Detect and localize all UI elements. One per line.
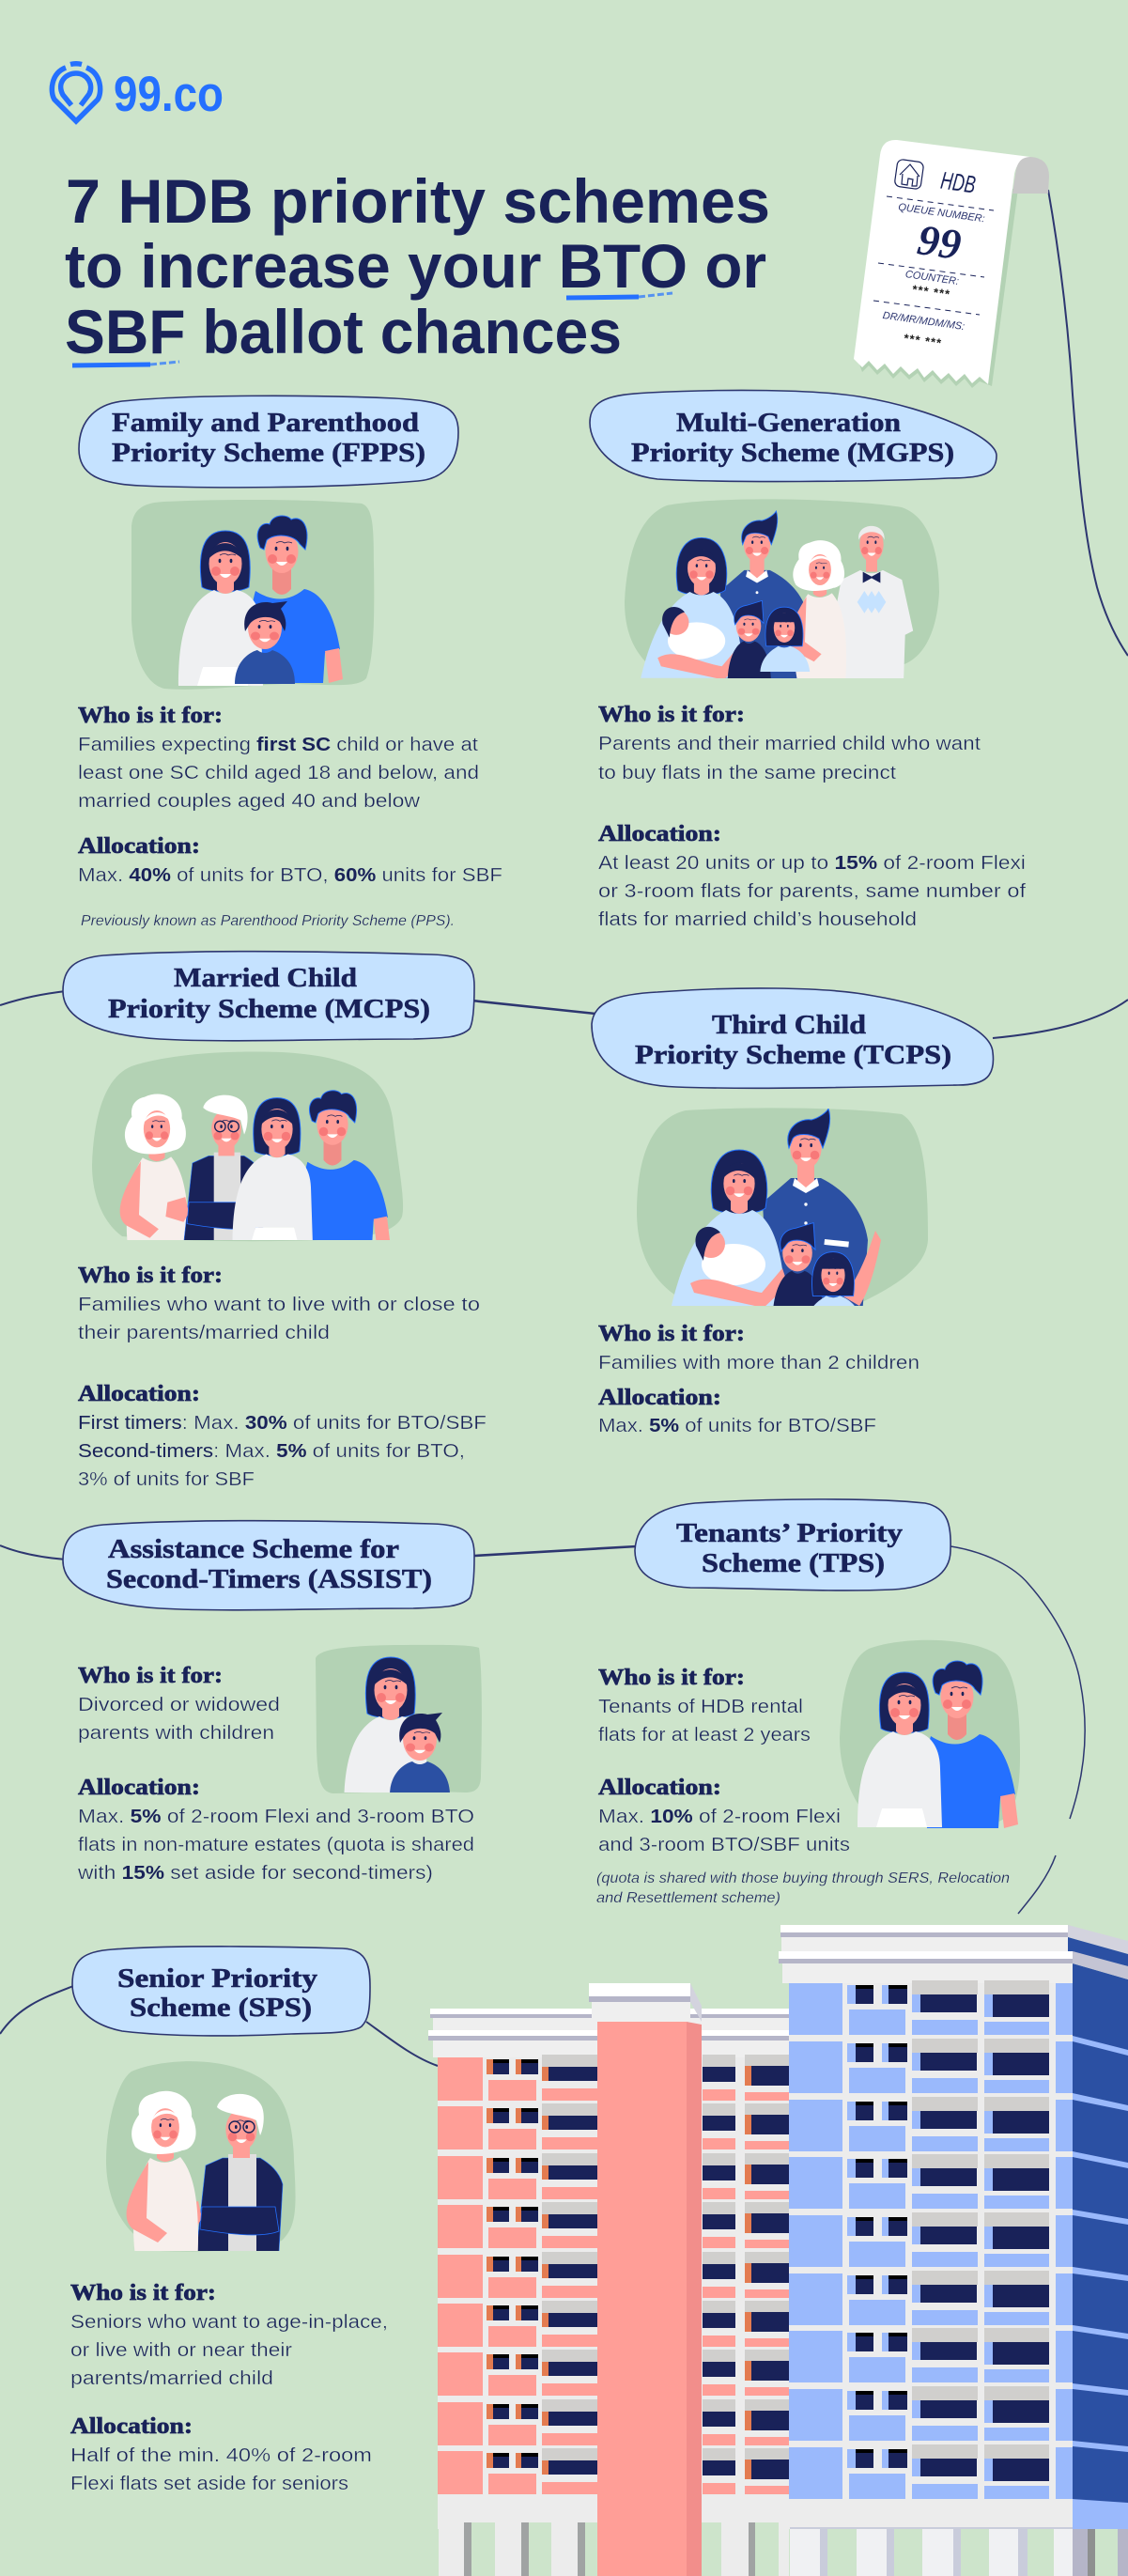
pill heading: FPPS: Priority Scheme (FPPS) [112,438,425,468]
text: allocation: Allocation: [78,834,200,859]
text: allocation [78,1382,487,1490]
panel: MCPS [63,952,487,1490]
text: allocation [598,1386,876,1436]
text: allocation: Allocation: [598,1386,721,1410]
text: allocation: Second-timers : Max. 5% of units for BTO, [78,1441,465,1462]
text: who is it for: Families with more than 2 children [598,1353,919,1373]
wordmark: 99.co [114,67,224,122]
text: who is it for [78,1264,480,1343]
text: who is it for: to buy flats in the same precinct [598,763,896,784]
icon: HDB queue receipt: COUNTER: [904,269,960,287]
text: who is it for [78,1664,280,1744]
text: who is it for: Who is it for: [598,703,745,727]
pill heading: ASSIST: Second-Timers (ASSIST) [106,1564,432,1594]
panel: MGPS [590,390,1027,930]
illustration: pink HDB block [428,1983,789,2576]
title [65,166,770,366]
text: allocation: Allocation: [78,1382,200,1406]
text: who is it for [598,1322,919,1373]
illustration: tenant couple [840,1640,1020,1828]
text: who is it for: parents with children [78,1723,274,1744]
text: who is it for: their parents/married child [78,1323,330,1343]
title: to increase your BTO or [65,231,766,301]
underline: BTO [566,293,672,298]
connector: left edge to ASSIST [0,1545,66,1560]
connector: TPS curve lower section [1018,1855,1056,1914]
illustration: parent and child [316,1645,482,1793]
text: who is it for: or live with or near their [70,2340,292,2361]
pill heading: TCPS: Third Child [712,1010,866,1040]
connector: TPS curve to building [950,1546,1085,1819]
pill heading: SPS [72,1947,370,2036]
text: who is it for: parents/married child [70,2368,273,2389]
text: who is it for [598,703,981,784]
text: who is it for: Who is it for: [78,1264,223,1288]
text: allocation: Half of the min. 40% of 2-room [70,2445,372,2466]
underline: SBF [72,362,179,365]
pill heading: MGPS: Priority Scheme (MGPS) [631,438,954,468]
text: allocation [77,1776,474,1884]
connector: left edge to MCPS [0,991,66,1005]
pill heading: MCPS: Priority Scheme (MCPS) [108,994,430,1024]
text: allocation: Allocation: [78,1776,200,1800]
text: who is it for: least one SC child aged 18 and below, and [78,763,479,784]
text: who is it for: Who is it for: [70,2281,216,2305]
panel: FPPS [78,396,502,929]
icon: HDB queue receipt: 99 [915,215,964,269]
panel: TPS [596,1499,1020,1906]
icon: HDB queue receipt: HDB [939,166,978,199]
text: who is it for: Divorced or widowed [78,1695,280,1715]
text: allocation: Max. 40% of units for BTO, 60% units for SBF [78,865,502,886]
text: who is it for: Who is it for: [598,1666,745,1690]
pill heading: TPS [635,1499,950,1591]
connector: MCPS to TCPS [471,1001,595,1014]
text: who is it for [598,1666,811,1746]
text: who is it for: Who is it for: [78,704,223,728]
panel: TCPS [592,988,994,1436]
illustration: parents with married child [92,1052,403,1261]
text: allocation: and 3-room BTO/SBF units [598,1835,850,1855]
note: (quota is shared with those buying through SERS, Relocation [596,1870,1010,1886]
icon: HDB queue receipt: *** *** [911,282,951,302]
illustration: senior couple [106,2061,296,2267]
text: allocation: flats in non-mature estates (quota is shared [78,1835,474,1855]
illustration: blue HDB block [779,1925,1128,2576]
panel: SPS [70,1947,388,2494]
panel: ASSIST [63,1521,482,1884]
icon: HDB queue receipt: QUEUE NUMBER: [898,202,985,225]
icon: HDB queue receipt [854,140,1049,388]
text: who is it for: Families who want to live with or close to [78,1295,480,1315]
pill heading: MCPS: Married Child [174,963,357,993]
text: allocation [78,834,502,886]
pill heading: TPS: Tenants’ Priority [676,1518,904,1548]
text: who is it for: flats for at least 2 years [598,1725,811,1746]
text: allocation: or 3-room flats for parents, same number of [598,881,1027,902]
pill heading: MGPS: Multi-Generation [676,408,901,438]
connector: ASSIST to TPS [474,1546,637,1556]
text: who is it for: Who is it for: [78,1664,223,1688]
icon: HDB queue receipt: *** *** [903,331,943,350]
pill heading: FPPS [79,396,458,488]
connector: SPS to building [366,2022,438,2066]
logo: 99.co [52,64,224,122]
text: allocation [70,2414,372,2494]
text: allocation: At least 20 units or up to 15% of 2-room Flexi [598,853,1026,874]
icon: location pin [52,64,100,121]
connector: receipt to right edge [1048,190,1128,656]
text: allocation: Flexi flats set aside for seniors [70,2474,348,2494]
text: allocation: with 15% set aside for second-timers) [77,1863,433,1884]
pill heading: TPS: Scheme (TPS) [702,1548,885,1578]
icon: HDB queue receipt: DR/MR/MDM/MS: [882,310,966,333]
text: who is it for [78,704,479,812]
illustration: parents and child [131,500,374,690]
text: who is it for: married couples aged 40 and below [78,791,421,812]
note: and Resettlement scheme) [596,1890,780,1906]
pill heading: SPS: Scheme (SPS) [130,1993,312,2023]
text: allocation: Allocation: [598,822,721,846]
pill heading: MCPS [63,952,474,1041]
text: allocation: Max. 5% of units for BTO/SBF [598,1416,876,1436]
text: allocation [598,822,1027,930]
note [596,1870,1010,1906]
title: 7 HDB priority schemes [66,166,770,236]
connector: left edge to SPS [0,1986,73,2034]
text: allocation: flats for married child’s household [598,909,917,930]
illustration: multi-generation family [625,499,939,687]
pill heading: FPPS: Family and Parenthood [112,408,419,438]
text: who is it for: Parents and their married child who want [598,734,981,754]
connector: TCPS to right edge [993,1000,1128,1038]
pill heading: ASSIST [63,1521,474,1610]
text: who is it for: Seniors who want to age-in-place, [70,2312,388,2333]
text: allocation: First timers : Max. 30% of units for BTO/SBF [78,1413,487,1434]
title: SBF ballot chances [65,297,622,366]
text: allocation: Max. 5% of 2-room Flexi and 3-room BTO [78,1807,474,1827]
text: allocation: Max. 10% of 2-room Flexi [598,1807,841,1827]
pill heading: ASSIST: Assistance Scheme for [108,1534,399,1564]
pill heading: TCPS: Priority Scheme (TCPS) [635,1040,951,1070]
text: who is it for: Families expecting first SC child or have at [78,735,478,755]
text: allocation: 3% of units for SBF [78,1469,255,1490]
text: allocation: Allocation: [70,2414,193,2439]
pill heading: TCPS [592,988,994,1088]
illustration: family with three children [637,1108,928,1325]
text: allocation [598,1776,850,1855]
text: who is it for: Tenants of HDB rental [598,1697,803,1717]
text: allocation: Allocation: [598,1776,721,1800]
note: Previously known as Parenthood Priority Scheme (PPS). [81,913,455,929]
pill heading: MGPS [590,390,997,482]
pill heading: SPS: Senior Priority [117,1963,318,1994]
text: who is it for: Who is it for: [598,1322,745,1346]
text: who is it for [70,2281,388,2389]
